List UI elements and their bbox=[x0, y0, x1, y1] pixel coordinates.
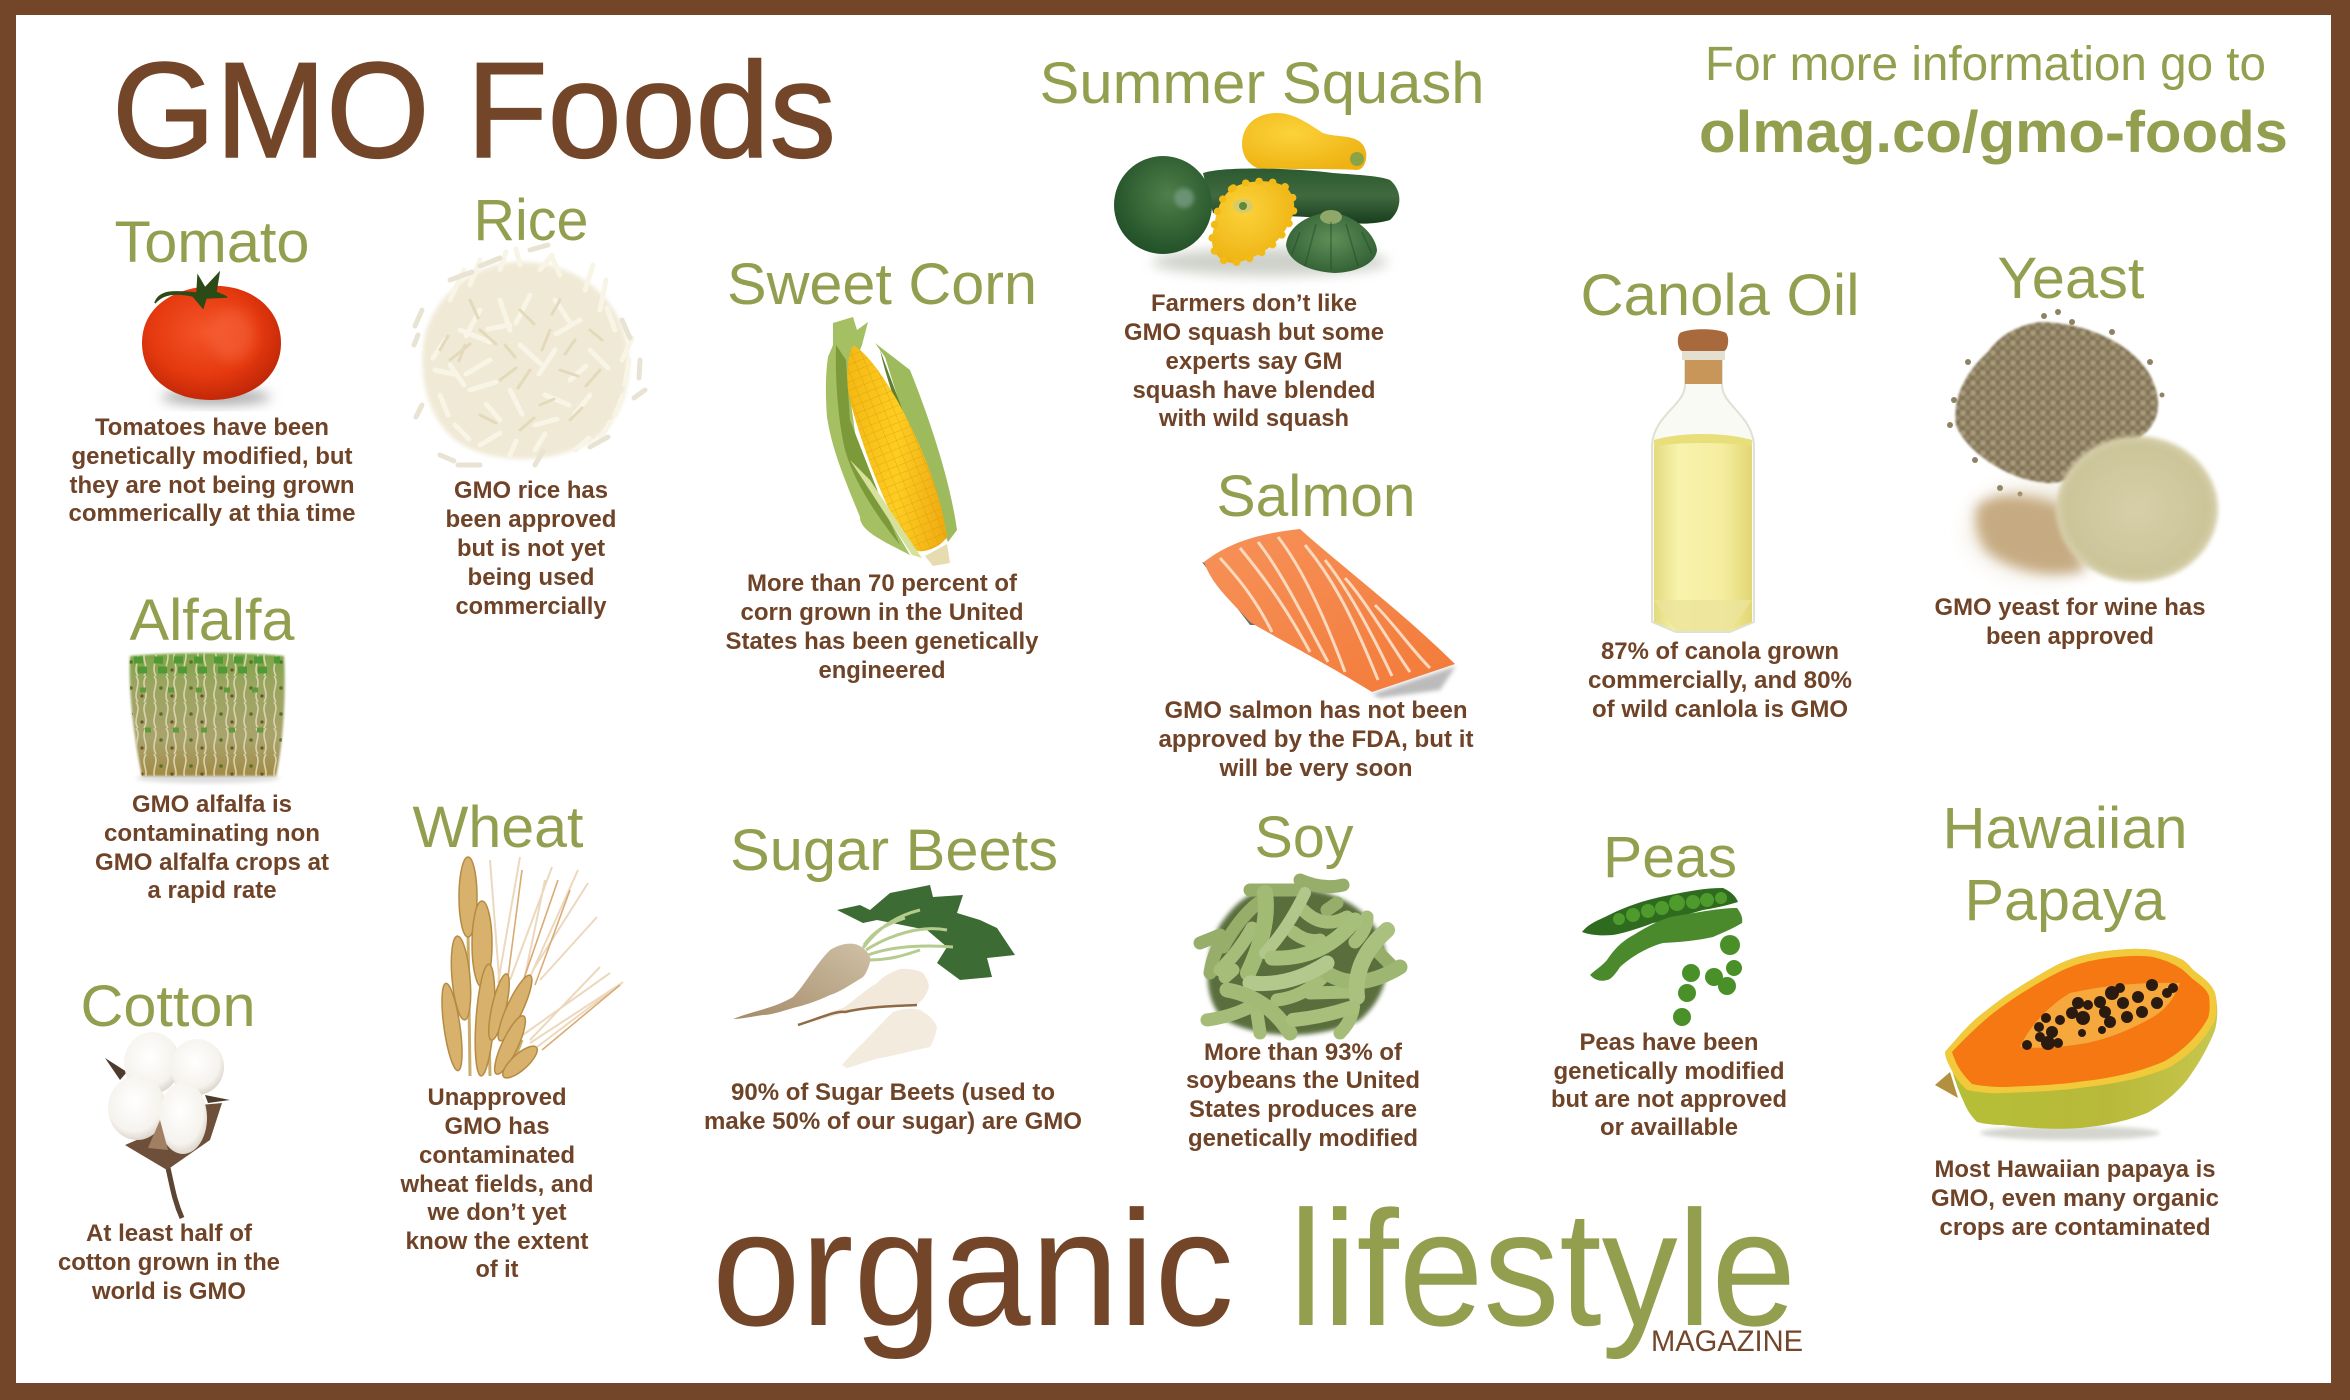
description: papaya bbox=[1931, 1156, 2219, 1241]
description: rice: commercially bbox=[456, 593, 607, 620]
description: alfalfa bbox=[95, 791, 329, 904]
description: papaya: GMO, even many organic bbox=[1931, 1185, 2219, 1212]
description: beets: 90% of Sugar Beets (used to bbox=[731, 1079, 1055, 1106]
description: squash: Farmers don’t like bbox=[1151, 290, 1357, 317]
icon: yeast bbox=[1947, 309, 2218, 582]
description: salmon: approved by the FDA, but it bbox=[1158, 726, 1474, 753]
heading: summer squash: Summer Squash bbox=[1040, 51, 1484, 116]
icon: wheat bbox=[438, 857, 623, 1083]
description: canola: 87% of canola grown bbox=[1601, 638, 1839, 665]
text: more information link: olmag.co/gmo-foods bbox=[1699, 100, 2288, 165]
description: corn bbox=[726, 570, 1039, 684]
description: cotton: At least half of bbox=[86, 1220, 253, 1247]
description: cotton: world is GMO bbox=[91, 1278, 246, 1305]
text: more information link: For more information go to bbox=[1705, 38, 2266, 91]
panel: rice bbox=[414, 188, 645, 620]
description: wheat: wheat fields, and bbox=[400, 1171, 594, 1198]
description: rice: but is not yet bbox=[457, 535, 605, 562]
heading: salmon: Salmon bbox=[1216, 464, 1416, 529]
text: more information link bbox=[1699, 38, 2288, 165]
heading: hawaiian papaya: Hawaiian bbox=[1942, 796, 2188, 861]
description: wheat bbox=[400, 1084, 594, 1283]
description: corn: States has been genetically bbox=[726, 628, 1039, 655]
description: salmon: will be very soon bbox=[1219, 755, 1412, 782]
description: alfalfa: GMO alfalfa crops at bbox=[95, 849, 329, 876]
logo: organic lifestyle magazine: MAGAZINE bbox=[1651, 1325, 1803, 1358]
icon: salmon bbox=[1202, 529, 1456, 698]
description: canola: commercially, and 80% bbox=[1588, 667, 1852, 694]
logo: organic lifestyle magazine: lifestyle bbox=[1289, 1177, 1796, 1360]
panel: cotton bbox=[58, 974, 280, 1305]
description: wheat: we don’t yet bbox=[426, 1199, 566, 1226]
description: peas: but are not approved bbox=[1551, 1086, 1787, 1113]
description: rice: GMO rice has bbox=[454, 477, 608, 504]
heading: cotton: Cotton bbox=[80, 974, 256, 1039]
description: alfalfa: a rapid rate bbox=[148, 877, 276, 904]
icon: oil bottle bbox=[1652, 329, 1754, 632]
panel: salmon bbox=[1158, 464, 1474, 782]
description: peas: Peas have been bbox=[1580, 1029, 1758, 1056]
heading: peas: Peas bbox=[1603, 825, 1737, 890]
panel: canola oil bbox=[1580, 263, 1860, 723]
icon: squash bbox=[1114, 113, 1399, 276]
description: alfalfa: GMO alfalfa is bbox=[132, 791, 292, 818]
description: soy: More than 93% of bbox=[1204, 1039, 1403, 1066]
description: peas: genetically modified bbox=[1554, 1058, 1784, 1085]
description: rice bbox=[446, 477, 616, 620]
description: squash bbox=[1124, 290, 1384, 432]
description: peas bbox=[1551, 1029, 1787, 1141]
icon: sugar beets bbox=[733, 885, 1015, 1068]
description: cotton bbox=[58, 1220, 280, 1305]
description: tomato: genetically modified, but bbox=[72, 443, 352, 470]
panel: peas bbox=[1551, 825, 1787, 1141]
description: alfalfa: contaminating non bbox=[104, 820, 320, 847]
heading: rice: Rice bbox=[474, 188, 588, 253]
description: corn: engineered bbox=[818, 657, 946, 684]
logo: organic lifestyle magazine bbox=[712, 1177, 1803, 1360]
description: soy: genetically modified bbox=[1188, 1125, 1418, 1152]
icon: peas bbox=[1582, 888, 1742, 1026]
description: soy: States produces are bbox=[1189, 1096, 1417, 1123]
heading: yeast: Yeast bbox=[1998, 246, 2144, 311]
description: wheat: Unapproved bbox=[428, 1084, 566, 1111]
description: squash: with wild squash bbox=[1158, 405, 1349, 432]
description: cotton: cotton grown in the bbox=[58, 1249, 280, 1276]
description: soy: soybeans the United bbox=[1186, 1067, 1420, 1094]
heading: wheat: Wheat bbox=[412, 795, 584, 860]
description: tomato: Tomatoes have been bbox=[95, 414, 329, 441]
description: papaya: Most Hawaiian papaya is bbox=[1934, 1156, 2216, 1183]
description: wheat: of it bbox=[476, 1256, 519, 1283]
description: salmon: GMO salmon has not been bbox=[1164, 697, 1468, 724]
icon: alfalfa sprouts bbox=[130, 653, 285, 783]
icon: rice bbox=[414, 245, 645, 465]
description: corn: More than 70 percent of bbox=[747, 570, 1018, 597]
description: yeast: been approved bbox=[1986, 623, 2154, 650]
description: squash: experts say GM bbox=[1166, 348, 1342, 375]
description: canola bbox=[1588, 638, 1852, 723]
description: beets: make 50% of our sugar) are GMO bbox=[704, 1108, 1082, 1135]
icon: soybeans bbox=[1200, 880, 1400, 1035]
panel: hawaiian papaya bbox=[1931, 796, 2219, 1241]
panel: tomato bbox=[68, 210, 356, 527]
heading: alfalfa: Alfalfa bbox=[130, 588, 295, 653]
panel: summer squash bbox=[1040, 51, 1484, 432]
description: tomato: commerically at thia time bbox=[68, 500, 356, 527]
description: rice: being used bbox=[468, 564, 594, 591]
description: squash: squash have blended bbox=[1132, 377, 1376, 404]
description: soy bbox=[1186, 1039, 1420, 1152]
description: yeast: GMO yeast for wine has bbox=[1934, 594, 2206, 621]
heading: hawaiian papaya: Papaya bbox=[1964, 868, 2166, 933]
panel: soy bbox=[1186, 805, 1420, 1152]
description: salmon bbox=[1158, 697, 1474, 782]
heading: sugar beets: Sugar Beets bbox=[730, 818, 1058, 883]
description: squash: GMO squash but some bbox=[1124, 319, 1384, 346]
heading: hawaiian papaya bbox=[1942, 796, 2188, 933]
panel: yeast bbox=[1934, 246, 2218, 650]
description: canola: of wild canlola is GMO bbox=[1592, 696, 1848, 723]
description: wheat: contaminated bbox=[419, 1142, 575, 1169]
title: GMO Foods bbox=[112, 34, 836, 186]
icon: tomato bbox=[142, 273, 281, 405]
description: corn: corn grown in the United bbox=[740, 599, 1024, 626]
description: tomato bbox=[68, 414, 356, 527]
description: wheat: know the extent bbox=[406, 1228, 589, 1255]
panel: wheat bbox=[400, 795, 623, 1283]
description: papaya: crops are contaminated bbox=[1940, 1214, 2210, 1241]
heading: sweet corn: Sweet Corn bbox=[727, 252, 1037, 317]
description: yeast bbox=[1934, 594, 2206, 650]
logo: organic lifestyle magazine: organic bbox=[712, 1177, 1234, 1360]
description: wheat: GMO has bbox=[444, 1113, 550, 1140]
heading: soy: Soy bbox=[1254, 805, 1354, 870]
panel: alfalfa bbox=[95, 588, 329, 904]
panel: sugar beets bbox=[704, 818, 1082, 1135]
heading: tomato: Tomato bbox=[114, 210, 310, 275]
description: beets bbox=[704, 1079, 1082, 1135]
icon: corn bbox=[826, 317, 957, 566]
icon: papaya bbox=[1935, 949, 2217, 1140]
icon: cotton boll bbox=[105, 1032, 230, 1218]
description: peas: or availlable bbox=[1600, 1114, 1738, 1141]
description: rice: been approved bbox=[446, 506, 616, 533]
description: tomato: they are not being grown bbox=[70, 472, 354, 499]
heading: canola oil: Canola Oil bbox=[1580, 263, 1860, 328]
panel: sweet corn bbox=[726, 252, 1039, 684]
